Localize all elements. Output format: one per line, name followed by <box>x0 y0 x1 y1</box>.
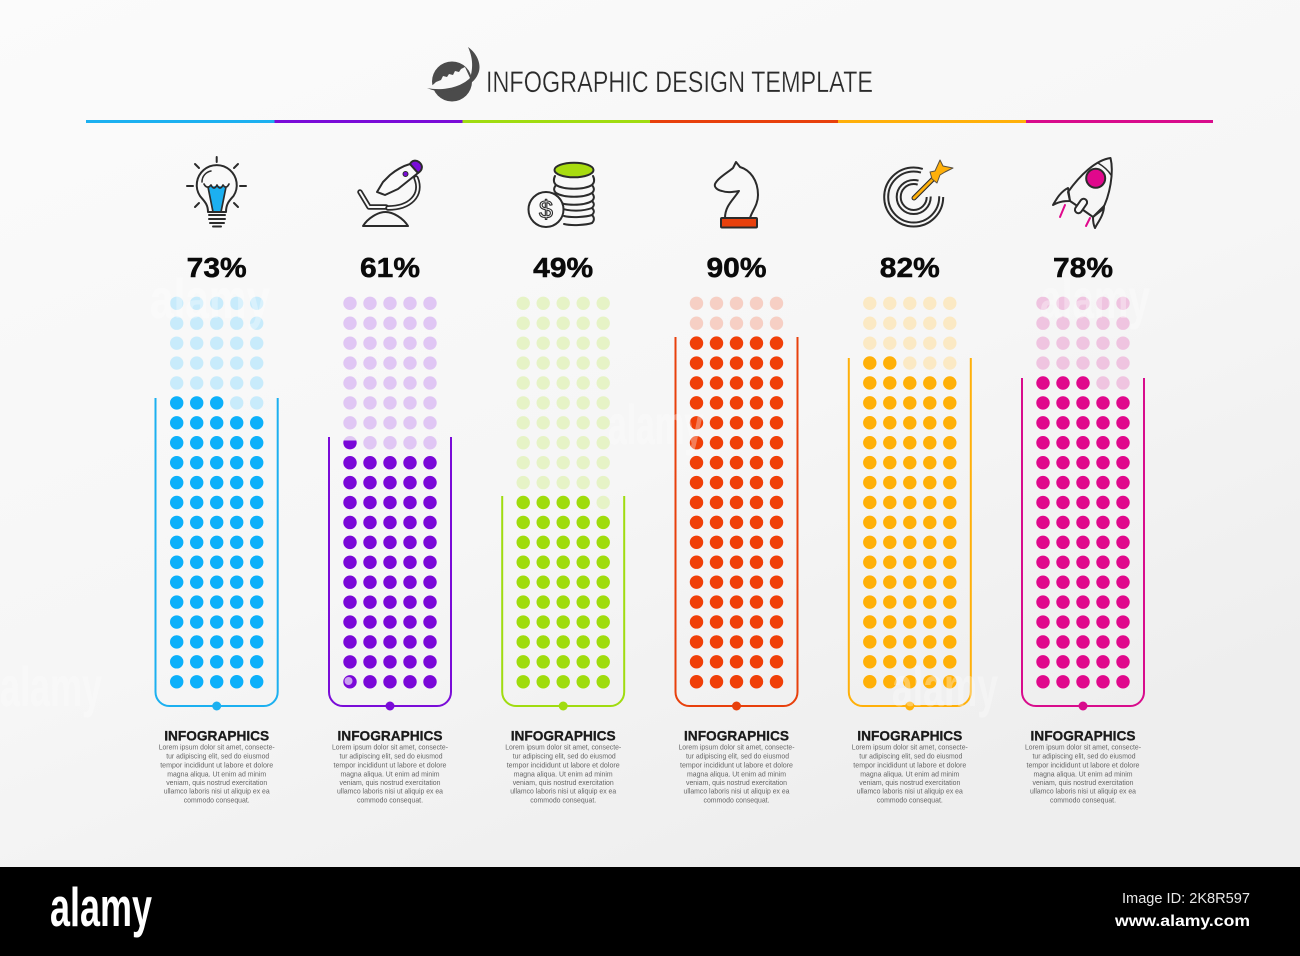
description <box>1025 742 1142 805</box>
description <box>852 742 968 805</box>
description: tempor incididunt ut labore et dolore <box>507 760 620 769</box>
description: tempor incididunt ut labore et dolore <box>160 760 273 769</box>
footer bar <box>0 867 1300 956</box>
panel: column 2 purple 61% <box>329 161 451 805</box>
description: commodo consequat. <box>184 796 250 805</box>
percentage: 49% <box>533 252 593 283</box>
description: tur adipiscing elit, sed do eiusmod <box>1032 752 1136 760</box>
dot column chart <box>523 303 603 682</box>
description: veniam, quis nostrud exercitation <box>166 778 267 787</box>
heading: INFOGRAPHICS <box>1030 728 1136 744</box>
description: veniam, quis nostrud exercitation <box>859 778 960 787</box>
description: Lorem ipsum dolor sit amet, consecte- <box>852 742 968 752</box>
icon: coin stack: $ <box>539 196 553 224</box>
description: tur adipiscing elit, sed do eiusmod <box>340 752 442 760</box>
percentage: 73% <box>187 252 247 283</box>
description: ullamco laboris nisi ut aliquip ex ea <box>164 787 270 796</box>
dot column chart <box>343 303 430 685</box>
icon: light bulb <box>187 157 246 226</box>
watermarks: alamy <box>0 655 102 718</box>
bracket frame <box>849 358 971 710</box>
description: ullamco laboris nisi ut aliquip ex ea <box>684 787 790 796</box>
bracket frame <box>676 337 798 710</box>
description: magna aliqua. Ut enim ad minim <box>514 769 613 778</box>
dot column chart <box>1043 303 1123 682</box>
description: tur adipiscing elit, sed do eiusmod <box>166 752 269 760</box>
description: magna aliqua. Ut enim ad minim <box>340 769 440 778</box>
description: ullamco laboris nisi ut aliquip ex ea <box>1030 787 1136 796</box>
description: commodo consequat. <box>530 796 596 805</box>
description: Lorem ipsum dolor sit amet, consecte- <box>159 742 275 752</box>
description: Lorem ipsum dolor sit amet, consecte- <box>678 742 795 752</box>
description <box>678 742 795 805</box>
percentage: 78% <box>1053 252 1113 283</box>
description: tur adipiscing elit, sed do eiusmod <box>859 752 962 760</box>
icon: chess knight <box>715 162 758 228</box>
description: tempor incididunt ut labore et dolore <box>680 760 793 769</box>
watermarks: alamy <box>608 393 703 456</box>
description: tempor incididunt ut labore et dolore <box>853 760 966 769</box>
header colour rule <box>86 120 1213 123</box>
panel: column 1 blue 73% <box>156 157 278 805</box>
icon: microscope <box>360 161 422 226</box>
panel: column 3 green 49% <box>502 163 624 805</box>
panel: column 6 pink 78% <box>1022 158 1144 805</box>
description: tempor incididunt ut labore et dolore <box>1026 760 1140 769</box>
description: tur adipiscing elit, sed do eiusmod <box>686 752 789 760</box>
dot column chart <box>696 303 776 682</box>
watermarks <box>0 267 1150 718</box>
description <box>505 742 622 805</box>
bracket frame <box>156 398 278 710</box>
watermarks: alamy <box>892 655 998 718</box>
description: commodo consequat. <box>357 796 423 805</box>
heading: INFOGRAPHICS <box>164 728 269 744</box>
panel: column 4 red 90% <box>676 162 798 805</box>
panel: column 5 yellow 82% <box>849 160 971 805</box>
image id: Image ID: 2K8R597 <box>1122 890 1250 907</box>
footer brand: alamy <box>50 876 152 938</box>
dot column chart <box>870 303 950 682</box>
description: ullamco laboris nisi ut aliquip ex ea <box>337 787 443 796</box>
title: INFOGRAPHIC DESIGN TEMPLATE <box>486 66 873 99</box>
icon: target with dart <box>884 160 953 226</box>
description: veniam, quis nostrud exercitation <box>513 778 614 787</box>
description: tur adipiscing elit, sed do eiusmod <box>513 752 616 760</box>
description: magna aliqua. Ut enim ad minim <box>167 769 266 778</box>
icon: coin stack <box>528 163 594 227</box>
description: veniam, quis nostrud exercitation <box>340 778 440 787</box>
description: magna aliqua. Ut enim ad minim <box>687 769 786 778</box>
description: magna aliqua. Ut enim ad minim <box>860 769 959 778</box>
heading: INFOGRAPHICS <box>511 728 616 744</box>
description: commodo consequat. <box>704 796 770 805</box>
description: commodo consequat. <box>1050 796 1116 805</box>
description: veniam, quis nostrud exercitation <box>1032 778 1134 787</box>
heading: INFOGRAPHICS <box>857 728 962 744</box>
description <box>332 742 449 805</box>
heading: INFOGRAPHICS <box>338 728 442 744</box>
footer url: www.alamy.com <box>1114 913 1250 930</box>
percentage: 90% <box>706 252 767 283</box>
description: tempor incididunt ut labore et dolore <box>334 760 447 769</box>
description: Lorem ipsum dolor sit amet, consecte- <box>505 742 622 752</box>
heading: INFOGRAPHICS <box>684 728 789 744</box>
description: commodo consequat. <box>877 796 943 805</box>
header logo <box>427 47 480 102</box>
watermarks: alamy <box>150 267 270 330</box>
percentage: 82% <box>880 252 940 283</box>
bracket frame <box>502 496 624 710</box>
description <box>159 742 275 805</box>
dot column chart <box>177 303 257 682</box>
percentage: 61% <box>360 252 420 283</box>
watermarks: alamy <box>1040 267 1150 330</box>
description: Lorem ipsum dolor sit amet, consecte- <box>332 742 449 752</box>
icon: rocket <box>1053 158 1112 228</box>
description: ullamco laboris nisi ut aliquip ex ea <box>510 787 616 796</box>
description: magna aliqua. Ut enim ad minim <box>1034 769 1133 778</box>
description: veniam, quis nostrud exercitation <box>686 778 787 787</box>
bracket frame <box>329 437 451 710</box>
description: ullamco laboris nisi ut aliquip ex ea <box>857 787 963 796</box>
description: Lorem ipsum dolor sit amet, consecte- <box>1025 742 1142 752</box>
bracket frame <box>1022 378 1144 710</box>
